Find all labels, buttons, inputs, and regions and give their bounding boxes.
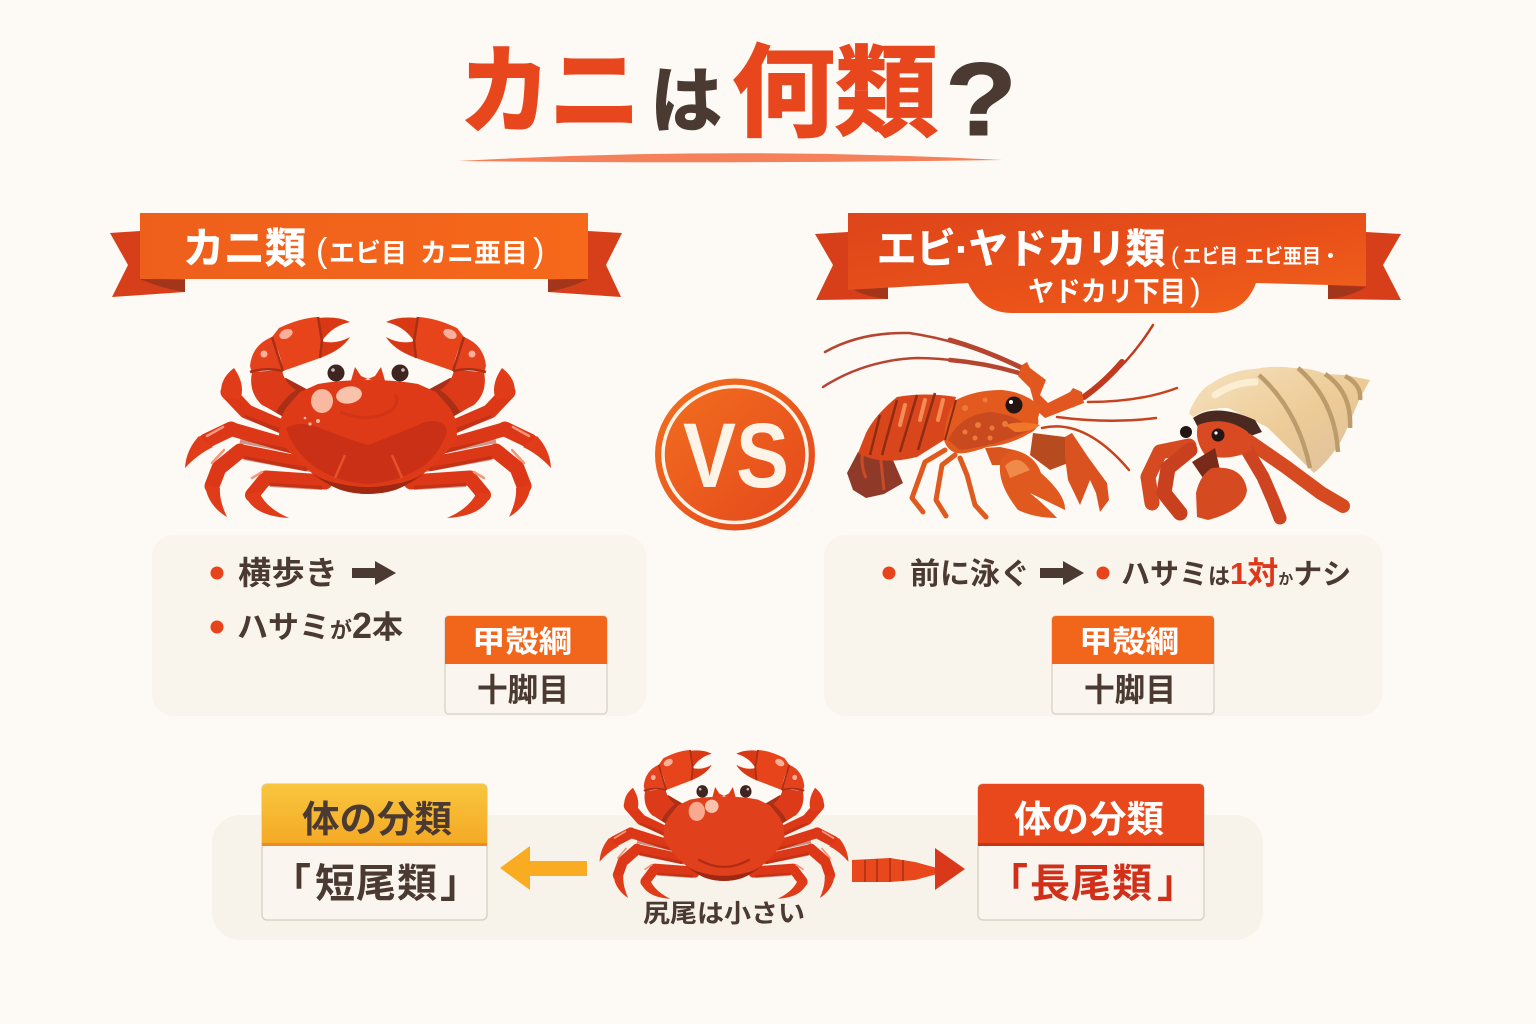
- banner: shrimp and hermit crab group: ): [1190, 272, 1201, 308]
- card: order label: 十脚目: [477, 672, 569, 708]
- banner: shrimp and hermit crab group: [815, 213, 1401, 313]
- card: long-tailed: 「長尾類」: [988, 862, 1197, 906]
- card: order label: [445, 616, 607, 714]
- banner: crab group: (: [316, 232, 328, 270]
- title: [458, 38, 1017, 162]
- trait: one pair of claws or none: ハサミは1対かナシ: [1121, 556, 1351, 591]
- banner: shrimp and hermit crab group: エビ目: [1183, 245, 1238, 268]
- trait: swims forward: 前に泳ぐ: [910, 558, 1030, 591]
- illustration: spiny lobster: [823, 325, 1177, 518]
- panel: body classification: [212, 750, 1263, 940]
- illustration: small crab: [600, 750, 848, 899]
- panel: crab traits: [152, 535, 646, 716]
- banner: shrimp and hermit crab group: エビ·ヤドカリ類: [877, 226, 1165, 272]
- arrow: toward short-tailed: [500, 846, 587, 890]
- title: ?: [945, 42, 1017, 158]
- card: long-tailed: [978, 784, 1204, 920]
- card: short-tailed: [262, 784, 487, 920]
- trait: two claws: ハサミが2本: [237, 605, 403, 646]
- badge: VS: [655, 378, 815, 530]
- card: short-tailed: 体の分類: [302, 799, 452, 840]
- card: long-tailed: 体の分類: [1014, 799, 1164, 840]
- banner: shrimp and hermit crab group: エビ亜目・: [1245, 245, 1340, 268]
- trait: walks sideways: 横歩き: [238, 555, 338, 591]
- banner: crab group: カニ亜目: [420, 238, 528, 268]
- caption: small tail: 尻尾は小さい: [643, 900, 805, 928]
- arrow: tail toward long-tailed: [852, 848, 965, 890]
- card: order label: 甲殻綱: [472, 626, 572, 659]
- badge: VS: VS: [683, 405, 789, 507]
- title: カニ: [460, 39, 640, 146]
- trait: swims forward: [882, 558, 1084, 591]
- title: は: [650, 62, 722, 142]
- banner: crab group: ): [533, 232, 544, 270]
- illustration: crab: [185, 317, 551, 518]
- banner: crab group: エビ目: [329, 238, 407, 268]
- title: 何類: [732, 38, 938, 150]
- card: short-tailed: 「短尾類」: [271, 862, 480, 906]
- banner: crab group: カニ類: [183, 225, 306, 272]
- trait: walks sideways: [210, 555, 396, 591]
- banner: shrimp and hermit crab group: ヤドカリ下目: [1028, 276, 1186, 307]
- card: order label: [1052, 616, 1214, 714]
- panel: shrimp and hermit crab traits: [824, 535, 1382, 716]
- illustration: hermit crab: [1148, 367, 1370, 520]
- card: order label: 十脚目: [1084, 672, 1176, 708]
- banner: shrimp and hermit crab group: (: [1171, 243, 1179, 270]
- card: order label: 甲殻綱: [1079, 626, 1179, 659]
- banner: crab group: [110, 213, 622, 297]
